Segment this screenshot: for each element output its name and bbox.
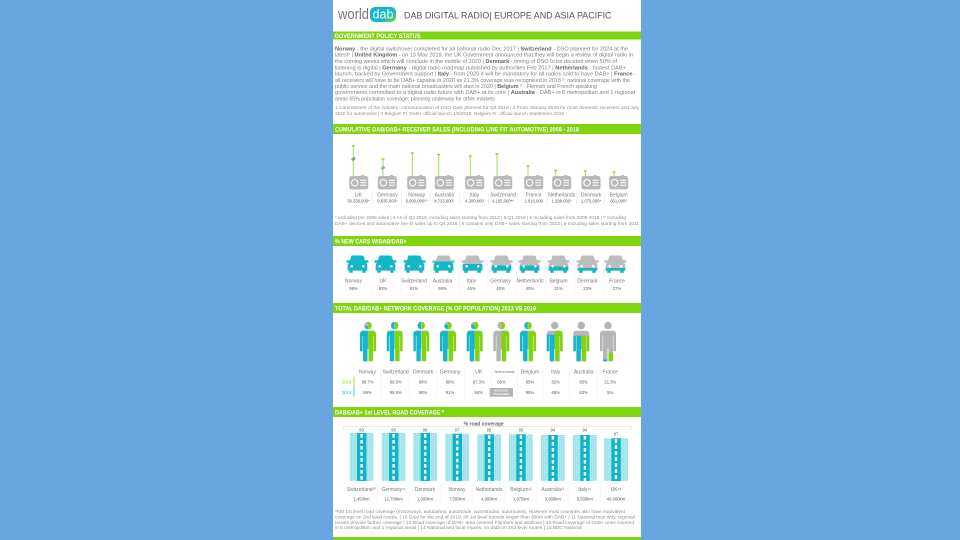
- road labels and lengths: 1,450km: [353, 497, 370, 502]
- country labels and sales values: 4,300,000: [465, 199, 484, 204]
- text block: policy by country: latest¹ | United Kingdom - on 13 May 2019, the UK Government announced that they will begin a review of digital radio in: [335, 53, 633, 59]
- coverage table: 98%: [419, 390, 427, 395]
- text block: policy by country: governments committed to a digital radio future with DAB+ at its core | Australia - DAB+ in 6 metropolitan and 1 regional: [335, 90, 635, 96]
- coverage table: 91%: [446, 390, 454, 395]
- road labels and lengths: Netherlands: [476, 487, 503, 493]
- country labels and percentages: 69%: [438, 286, 447, 291]
- heading bar: new cars: [333, 236, 641, 246]
- country labels and sales values: 4,165,000*⁸: [492, 199, 514, 204]
- panel: government policy status: [333, 32, 641, 116]
- coverage table: 98%: [446, 380, 454, 385]
- road bar chart: 98: [423, 427, 428, 432]
- footnotes: receiver sales: DAB+ devices and automotive line-fit sales up to Q4 2018 | 8 contains only DAB+ sales starting from 2013 | 9 Including sales starting from 2011: [335, 221, 640, 226]
- panel: network coverage: [333, 303, 641, 398]
- road bar chart: 94: [582, 427, 588, 432]
- heading bar: government policy status: GOVERNMENT POLICY STATUS: [334, 33, 420, 40]
- country labels and sales values: [347, 192, 628, 204]
- road labels and lengths: Norway: [449, 487, 466, 493]
- country labels and percentages: Australia: [433, 279, 452, 285]
- country labels and percentages: 91%: [410, 286, 418, 291]
- country labels and percentages: Netherlands: [517, 279, 544, 285]
- text block: policy by country: listening is digital | Germany - digital radio roadmap published by authorities Feb 2017 | Netherlands - fastest DAB+: [335, 65, 626, 71]
- road bar chart: 94: [550, 427, 556, 432]
- coverage table: [359, 369, 618, 397]
- country labels and percentages: [345, 279, 625, 291]
- coverage table: 89%: [363, 390, 372, 395]
- country labels and percentages: 98%: [349, 286, 358, 291]
- country labels and sales values: 1,298,000⁹: [551, 199, 572, 204]
- country labels and percentages: Italy: [467, 279, 477, 285]
- coverage table: France: [603, 369, 618, 375]
- panel: cumulative receiver sales: [333, 124, 641, 226]
- country labels and percentages: 23%: [583, 286, 592, 291]
- road labels and lengths: 6,500km: [577, 497, 593, 502]
- text block: policy by country: Norway - the digital switchover completed for all national radio Dec 2017 | Switzerland - DSO planned for 2024 at the: [335, 46, 628, 52]
- road labels and lengths: Germany¹¹: [382, 487, 406, 493]
- coverage table: Belgium: [521, 369, 539, 375]
- country labels and percentages: 40%: [496, 286, 505, 291]
- footnotes: road coverage: muxes provide further coverage | 12 Road coverage of DAB+ area covered Flanders and Wallonia | 13 Road coverage of DAB+ ones covered: [335, 520, 635, 525]
- country labels and percentages: Belgium: [549, 279, 568, 285]
- country labels and sales values: Denmark: [581, 192, 602, 198]
- road labels and lengths: 7,500km: [449, 497, 466, 502]
- country labels and sales values: Belgium: [610, 192, 628, 198]
- country labels and sales values: France: [526, 192, 542, 198]
- heading bar: network coverage: TOTAL DAB/DAB+ NETWORK COVERAGE (% OF POPULATION) 2013 VS 2019: [335, 306, 536, 312]
- road bar chart: 98: [391, 427, 396, 432]
- country labels and percentages: 46%: [467, 286, 476, 291]
- infographic sheet: [333, 0, 641, 540]
- country labels and sales values: Switzerland: [490, 192, 516, 198]
- coverage table: 95%: [497, 380, 506, 385]
- data not available tag: AVAILABLE: [493, 392, 509, 396]
- footnotes: road coverage: in 6 metropolitan and 1 regional areas | 14 National and local muxes, no data on 2nd level routes | 15 BBC National: [335, 525, 582, 530]
- country labels and sales values: Norway: [408, 192, 426, 198]
- country labels and sales values: Germany: [377, 192, 398, 198]
- coverage table: 95%: [526, 380, 534, 385]
- footnotes: receiver sales: [335, 215, 640, 226]
- country labels and percentages: Norway: [345, 279, 362, 285]
- country labels and percentages: Denmark: [577, 279, 598, 285]
- coverage table: Germany: [440, 369, 461, 375]
- coverage table: Italy: [551, 369, 561, 375]
- road bar chart: 99: [359, 427, 364, 432]
- road labels and lengths: Belgium¹²: [510, 487, 532, 493]
- coverage table: 95%: [526, 390, 534, 395]
- coverage table: 5%: [607, 390, 614, 395]
- country labels and sales values: 4,733,000⁷: [434, 199, 455, 204]
- country labels and sales values: 9,835,000⁴: [377, 199, 398, 204]
- road labels and lengths: Switzerland¹⁰: [347, 487, 376, 493]
- lollipop chart: radios and sales stems: [349, 146, 628, 189]
- footnotes: policy: [335, 105, 640, 116]
- footnotes: policy: 1 Commitment of the industry; communication of DSO-Date planned for Q3 2019 | 2 From January 2020 for most domestic receivers and July: [335, 105, 640, 110]
- country labels and sales values: Australia: [435, 192, 454, 198]
- title: DAB DIGITAL RADIO| EUROPE AND ASIA PACIFIC: [404, 10, 612, 20]
- road labels and lengths: 1,000km: [417, 497, 434, 502]
- road labels and lengths: 1,675km: [513, 497, 530, 502]
- legend: years: 2019: [342, 380, 352, 384]
- country labels and sales values: 1,075,000*: [581, 199, 601, 204]
- legend: years: 2013: [342, 390, 352, 395]
- header: [337, 7, 612, 23]
- road bar chart: 95: [519, 427, 524, 432]
- people icons: coverage 2013 and 2019: [360, 322, 616, 361]
- road labels and lengths: Australia¹³: [541, 487, 565, 493]
- coverage table: 99.7%: [362, 380, 374, 385]
- road labels and lengths: 4,800km: [481, 497, 498, 502]
- coverage table: Norway: [359, 369, 376, 375]
- coverage table: 99.5%: [390, 380, 402, 385]
- data not available tag: DATA NOT: [494, 389, 509, 393]
- country labels and percentages: Switzerland: [401, 279, 427, 285]
- coverage table: UK: [475, 369, 483, 375]
- country labels and sales values: 661,000⁹: [610, 199, 627, 204]
- coverage table: 65%: [552, 390, 560, 395]
- legend: years: [342, 377, 354, 397]
- coverage table: 63%: [580, 390, 588, 395]
- text block: policy by country: public service and the main national broadcasters will start in 2020 | Belgium ³ - Flemish and French speaking: [335, 84, 597, 90]
- coverage table: 97.3%: [473, 380, 485, 385]
- text block: policy by country: launch, backed by Government support | Italy - from 2020 it will be mandatory for all radios sold to have DAB+ | France -: [335, 72, 636, 78]
- coverage table: 99.5%: [390, 390, 402, 395]
- country labels and percentages: 31%: [554, 286, 563, 291]
- text block: policy by country: areas 65% population coverage; planning underway for other markets: [335, 96, 495, 102]
- country labels and percentages: UK: [380, 279, 387, 285]
- road labels and lengths: Denmark: [415, 487, 436, 493]
- footnotes: road coverage: coverage on 2nd level routes. | 10 Goal for the end of 2019: All 1st level tunnels longer than 300m with DAB+ | 11 National mux only, regional: [335, 515, 635, 520]
- heading bar: government policy status: [333, 32, 641, 40]
- heading bar: road coverage: [333, 407, 641, 417]
- heading bar: road coverage: DAB/DAB+ 1st LEVEL ROAD COVERAGE *: [335, 410, 445, 416]
- text block: policy by country: the coming weeks which will conclude in the middle of 2020 | Denmark - timing of DSO to be decided when 50% of: [335, 59, 618, 65]
- coverage table: 94%: [475, 390, 483, 395]
- logo: WorldDAB: [337, 7, 396, 23]
- road labels and lengths: 3,900km: [545, 497, 561, 502]
- footnotes: road coverage: *KM 1st level road coverage (motorways, autobahns, autostrade, autostradas, autoroutes). However most countries also have equivalent: [335, 509, 626, 514]
- country labels and sales values: 6,000,000⁵⁶: [406, 199, 428, 204]
- road labels and lengths: Italy¹⁴: [578, 487, 591, 493]
- footnotes: policy: 2020 for automotive | 3 Belgium Fl. DAB+ official launch 1/9/2018; Belgium Fr. official launch September 2019: [335, 111, 565, 116]
- logo: WorldDAB: world: [337, 7, 369, 23]
- footnotes: receiver sales: * including pre 2008 sales | 4 As of Q2 2018, including sales starting from 2013 | 5 Q1 2019 | 6 Including sales from 2009-2018 | 7 Including: [335, 215, 627, 220]
- country labels and sales values: Italy: [470, 192, 480, 198]
- coverage table: Switzerland: [383, 369, 409, 375]
- country labels and sales values: UK: [355, 192, 363, 198]
- road labels and lengths: [347, 487, 626, 502]
- footnotes: road coverage: [335, 509, 635, 530]
- heading bar: receiver sales: [333, 124, 641, 134]
- coverage table: 82%: [552, 380, 560, 385]
- logo: WorldDAB: dab: [372, 8, 394, 22]
- road bar chart: 97: [455, 427, 460, 432]
- coverage table: Australia: [574, 369, 594, 375]
- country labels and percentages: 40%: [526, 286, 534, 291]
- coverage table: 21.3%: [604, 380, 617, 385]
- country labels and percentages: 93%: [379, 286, 387, 291]
- icon: axis break UK: [351, 157, 356, 161]
- icon: axis break Germany: [381, 166, 385, 170]
- road labels and lengths: 46,000km: [607, 497, 626, 502]
- country labels and sales values: 39,338,000*: [347, 199, 370, 204]
- heading bar: new cars: % NEW CARS W/DAB/DAB+: [335, 238, 407, 245]
- country labels and percentages: France: [609, 279, 625, 285]
- text block: policy by country: [335, 46, 636, 102]
- coverage table: Denmark: [413, 369, 434, 375]
- road labels and lengths: UK¹⁵: [611, 487, 621, 493]
- coverage table: 65%: [580, 380, 588, 385]
- panel: road coverage: [333, 407, 641, 530]
- heading bar: receiver sales: CUMULATIVE DAB/DAB+ RECEIVER SALES (INCLUDING LINE FIT AUTOMOTIVE) 2008 - 2018: [335, 126, 579, 134]
- panel: new cars with DAB: [333, 236, 641, 292]
- country labels and percentages: 27%: [613, 286, 621, 291]
- text block: policy by country: all receivers will have to be DAB+ capable in 2020 as 21.3% coverage was recognised in 2018 ²; national coverage with the: [335, 78, 630, 84]
- country labels and percentages: Germany: [490, 279, 511, 285]
- road bar chart: 87: [614, 432, 619, 437]
- next section heading bar, cropped: [333, 537, 641, 540]
- road bar chart: 95: [487, 427, 492, 432]
- coverage table: Netherlands: [494, 370, 515, 374]
- heading bar: network coverage: [333, 303, 641, 313]
- axis title: % road coverage: [464, 421, 504, 427]
- car icons filled by percentage: [346, 256, 626, 273]
- road bar chart: [350, 427, 628, 481]
- country labels and sales values: Netherlands: [548, 192, 576, 198]
- coverage table: 98%: [419, 380, 427, 385]
- data not available tag: [490, 388, 513, 397]
- country labels and sales values: 2,018,000: [524, 199, 544, 204]
- road labels and lengths: 12,700km: [384, 497, 403, 502]
